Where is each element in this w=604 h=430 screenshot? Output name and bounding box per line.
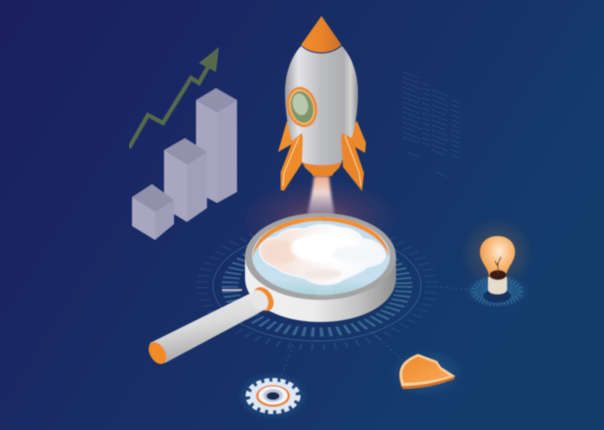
- specular highlight: [303, 217, 334, 298]
- artwork: [129, 16, 533, 420]
- rocket exhaust: [307, 176, 335, 218]
- nozzle: [302, 161, 342, 176]
- dashed connector lines: [280, 287, 473, 380]
- tall bar: [196, 88, 237, 203]
- rocket: [278, 16, 366, 191]
- rocket body: [285, 46, 358, 165]
- chart: isometric bars: [132, 88, 237, 240]
- bulb glass: [480, 236, 515, 280]
- small bar: [132, 184, 174, 240]
- handle: [145, 283, 278, 367]
- cloud in lens: [260, 225, 385, 284]
- bulb base: [488, 277, 507, 294]
- gear icon: [237, 372, 309, 420]
- window: [282, 83, 322, 131]
- orange inner rim: [253, 217, 389, 258]
- rim side: [245, 256, 396, 322]
- shield icon: [389, 348, 465, 398]
- medium bar: [164, 138, 207, 222]
- chart: growth arrow: [129, 47, 219, 148]
- rim top: [245, 213, 396, 300]
- nose cone: [301, 16, 342, 52]
- cloud shading: [266, 233, 372, 279]
- lightbulb icon: [461, 217, 533, 308]
- back fins: [278, 121, 292, 152]
- radial dial rings: [202, 225, 432, 347]
- front fins: [281, 133, 303, 191]
- data text panel: [403, 72, 460, 177]
- glow behind magnifier: [240, 178, 400, 262]
- magnifier: [145, 213, 396, 367]
